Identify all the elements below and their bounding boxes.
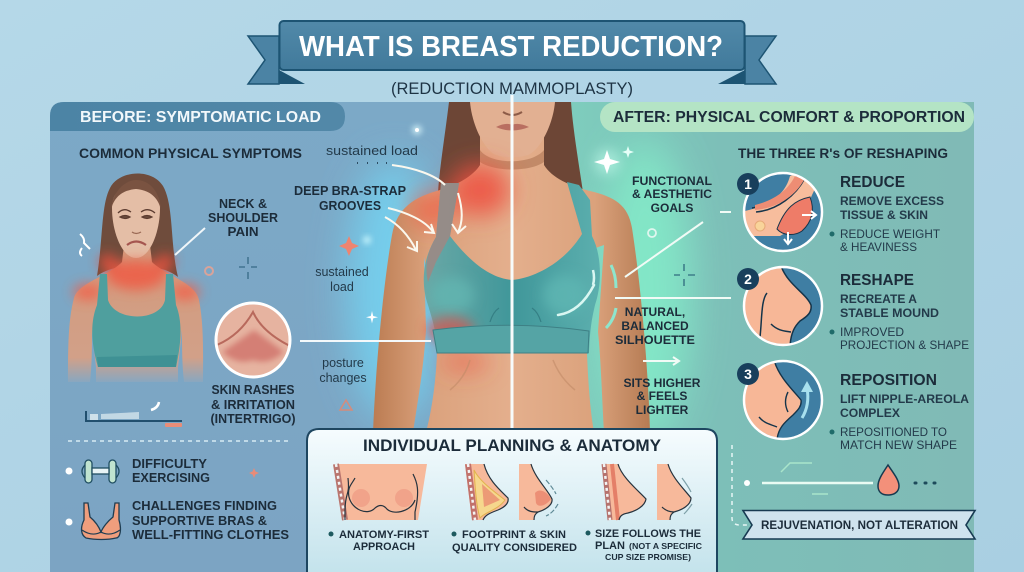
pain glow (73, 254, 200, 300)
title banner (248, 21, 776, 84)
label: neck and shoulder pain: SHOULDER (208, 211, 278, 225)
symptom: difficulty exercising: DIFFICULTY (132, 457, 208, 471)
symptom: bra fit challenges (66, 499, 289, 542)
caption: anatomy first: APPROACH (353, 541, 415, 553)
panel: before (50, 102, 449, 572)
after header (600, 102, 974, 132)
text: reshape: STABLE MOUND (840, 306, 939, 320)
caption: size follows plan: (NOT A SPECIFIC (629, 541, 702, 551)
text: reposition: REPOSITION (840, 372, 937, 389)
label: neck and shoulder pain: NECK & (219, 197, 267, 211)
divider (68, 440, 289, 442)
label: skin rashes (210, 383, 296, 426)
bra strain tint (426, 183, 459, 282)
after annotations (594, 146, 731, 417)
small figure: woman with neck and shoulder pain (68, 173, 203, 382)
label: sustained load lower: sustained (315, 265, 369, 279)
caption: footprint and skin: QUALITY CONSIDERED (452, 542, 577, 554)
subtitle: (REDUCTION MAMMOPLASTY) (391, 79, 633, 98)
hair (438, 102, 583, 192)
label: posture changes: changes (319, 371, 367, 385)
strain marks (80, 234, 90, 256)
label: sustained load top: sustained load (326, 144, 418, 158)
label: functional and aesthetic goals (632, 174, 712, 215)
label: functional and aesthetic goals: GOALS (651, 201, 693, 215)
label: natural balanced silhouette: BALANCED (621, 319, 689, 333)
text: reshape: RECREATE A (840, 292, 917, 306)
after header: AFTER: PHYSICAL COMFORT & PROPORTION (613, 109, 965, 126)
label: deep bra-strap grooves: DEEP BRA-STRAP (294, 184, 406, 198)
label: sits higher and feels lighter (624, 376, 701, 417)
text: reshape: PROJECTION & SHAPE (840, 338, 969, 352)
text: reposition: COMPLEX (840, 406, 900, 420)
text: reduce: REDUCE WEIGHT (840, 227, 941, 241)
label: skin rashes: SKIN RASHES (212, 383, 294, 397)
text: reshape (830, 272, 969, 352)
decorative markers (205, 125, 422, 478)
before header (50, 102, 345, 131)
heading: three Rs: THE THREE R's OF RESHAPING (738, 146, 948, 161)
caption: anatomy first: ANATOMY-FIRST (339, 529, 429, 541)
label: deep bra-strap grooves: GROOVES (319, 199, 381, 213)
rib shading (450, 360, 575, 390)
caption: size follows plan: PLAN (595, 540, 625, 552)
sports bra (424, 182, 600, 353)
banner: rejuvenation (743, 510, 975, 539)
text: reposition (830, 372, 969, 452)
panel: after (512, 102, 974, 572)
symptom: difficulty exercising (66, 457, 210, 485)
caption: footprint and skin (452, 529, 577, 554)
droplet timeline (732, 445, 935, 525)
text: reduce: REMOVE EXCESS (840, 194, 944, 208)
title banner: WHAT IS BREAST REDUCTION? (299, 31, 723, 63)
icon: reduce circle (737, 172, 823, 252)
text: reposition: REPOSITIONED TO (840, 425, 947, 439)
before header: BEFORE: SYMPTOMATIC LOAD (80, 109, 321, 126)
label: sustained load lower: load (330, 280, 354, 294)
inset: skin rash circle (215, 302, 291, 378)
cup shading (430, 275, 587, 315)
caption: anatomy first (328, 529, 429, 553)
arm contour glow (606, 265, 616, 328)
label: sits higher and feels lighter: & FEELS (637, 389, 687, 403)
icon: reposition circle: 3 (744, 366, 752, 382)
text: reposition: LIFT NIPPLE-AREOLA (840, 392, 969, 406)
caption: size follows plan: CUP SIZE PROMISE) (605, 552, 691, 562)
label: skin rashes: (INTERTRIGO) (210, 412, 296, 426)
text: reposition: MATCH NEW SHAPE (840, 438, 957, 452)
label: functional and aesthetic goals: & AESTHETIC (632, 187, 712, 201)
before annotations (294, 144, 466, 385)
banner: rejuvenation: REJUVENATION, NOT ALTERATION (761, 518, 958, 532)
central figure: split before and after torso (373, 102, 650, 432)
caption: size follows plan (586, 528, 702, 562)
label: natural balanced silhouette (615, 305, 695, 347)
label: neck and shoulder pain: PAIN (228, 225, 258, 239)
red strain glow (412, 164, 510, 371)
facial features (118, 210, 155, 245)
label: functional and aesthetic goals: FUNCTIONAL (632, 174, 712, 188)
hair back (97, 173, 178, 277)
centre divider (510, 95, 514, 430)
heading: common physical symptoms: COMMON PHYSICAL SYMPTOMS (79, 146, 302, 161)
arrows to strain points (385, 165, 466, 251)
label: neck and shoulder pain (175, 197, 278, 255)
icon: posture ruler (86, 402, 182, 427)
highlight on cup (558, 270, 594, 315)
sparkles (594, 146, 695, 286)
label: sustained load top (326, 144, 418, 163)
symptom: difficulty exercising: EXERCISING (132, 471, 210, 485)
text: reduce: REDUCE (840, 174, 905, 191)
hair top (111, 180, 161, 210)
illustration: size follows plan result (657, 464, 692, 520)
illustration: skin footprint (519, 464, 558, 520)
arms and torso (68, 245, 203, 382)
icon: reshape circle: 2 (744, 271, 752, 287)
label: posture changes: posture (322, 356, 364, 370)
label: deep bra-strap grooves (294, 184, 406, 213)
illustration: footprint side view (465, 464, 508, 520)
symptom: bra fit challenges: SUPPORTIVE BRAS & (132, 514, 267, 528)
text: reduce: & HEAVINESS (840, 240, 917, 254)
panel: individual planning and anatomy (307, 429, 717, 572)
text: reduce (830, 174, 944, 254)
symptom: bra fit challenges: CHALLENGES FINDING (132, 499, 277, 513)
text: reshape: RESHAPE (840, 272, 914, 289)
face (112, 185, 160, 258)
bra fold marks (490, 308, 541, 322)
symptom: bra fit challenges: WELL-FITTING CLOTHES (132, 528, 289, 542)
icon: reshape circle (737, 266, 823, 346)
bra band (433, 325, 589, 353)
leader line: rash (300, 340, 431, 342)
label: natural balanced silhouette: NATURAL, (625, 305, 685, 319)
illustration: anatomy first (336, 464, 427, 520)
label: sits higher and feels lighter: SITS HIGHER (624, 376, 701, 390)
sports bra (92, 274, 180, 367)
text: reduce: TISSUE & SKIN (840, 208, 928, 222)
leader lines (615, 212, 731, 365)
illustration: size follows plan side view (602, 464, 646, 520)
icon: reposition circle (737, 360, 823, 440)
label: natural balanced silhouette: SILHOUETTE (615, 333, 695, 347)
heading: INDIVIDUAL PLANNING & ANATOMY (363, 436, 662, 455)
label: sits higher and feels lighter: LIGHTER (636, 403, 689, 417)
text: reshape: IMPROVED (840, 325, 904, 339)
nose and lips (496, 112, 529, 130)
caption: size follows plan: SIZE FOLLOWS THE (595, 528, 701, 540)
torso and arms (373, 130, 650, 432)
caption: footprint and skin: FOOTPRINT & SKIN (462, 529, 566, 541)
face (470, 102, 555, 157)
label: skin rashes: & IRRITATION (211, 398, 295, 412)
icon: reduce circle: 1 (744, 176, 752, 192)
